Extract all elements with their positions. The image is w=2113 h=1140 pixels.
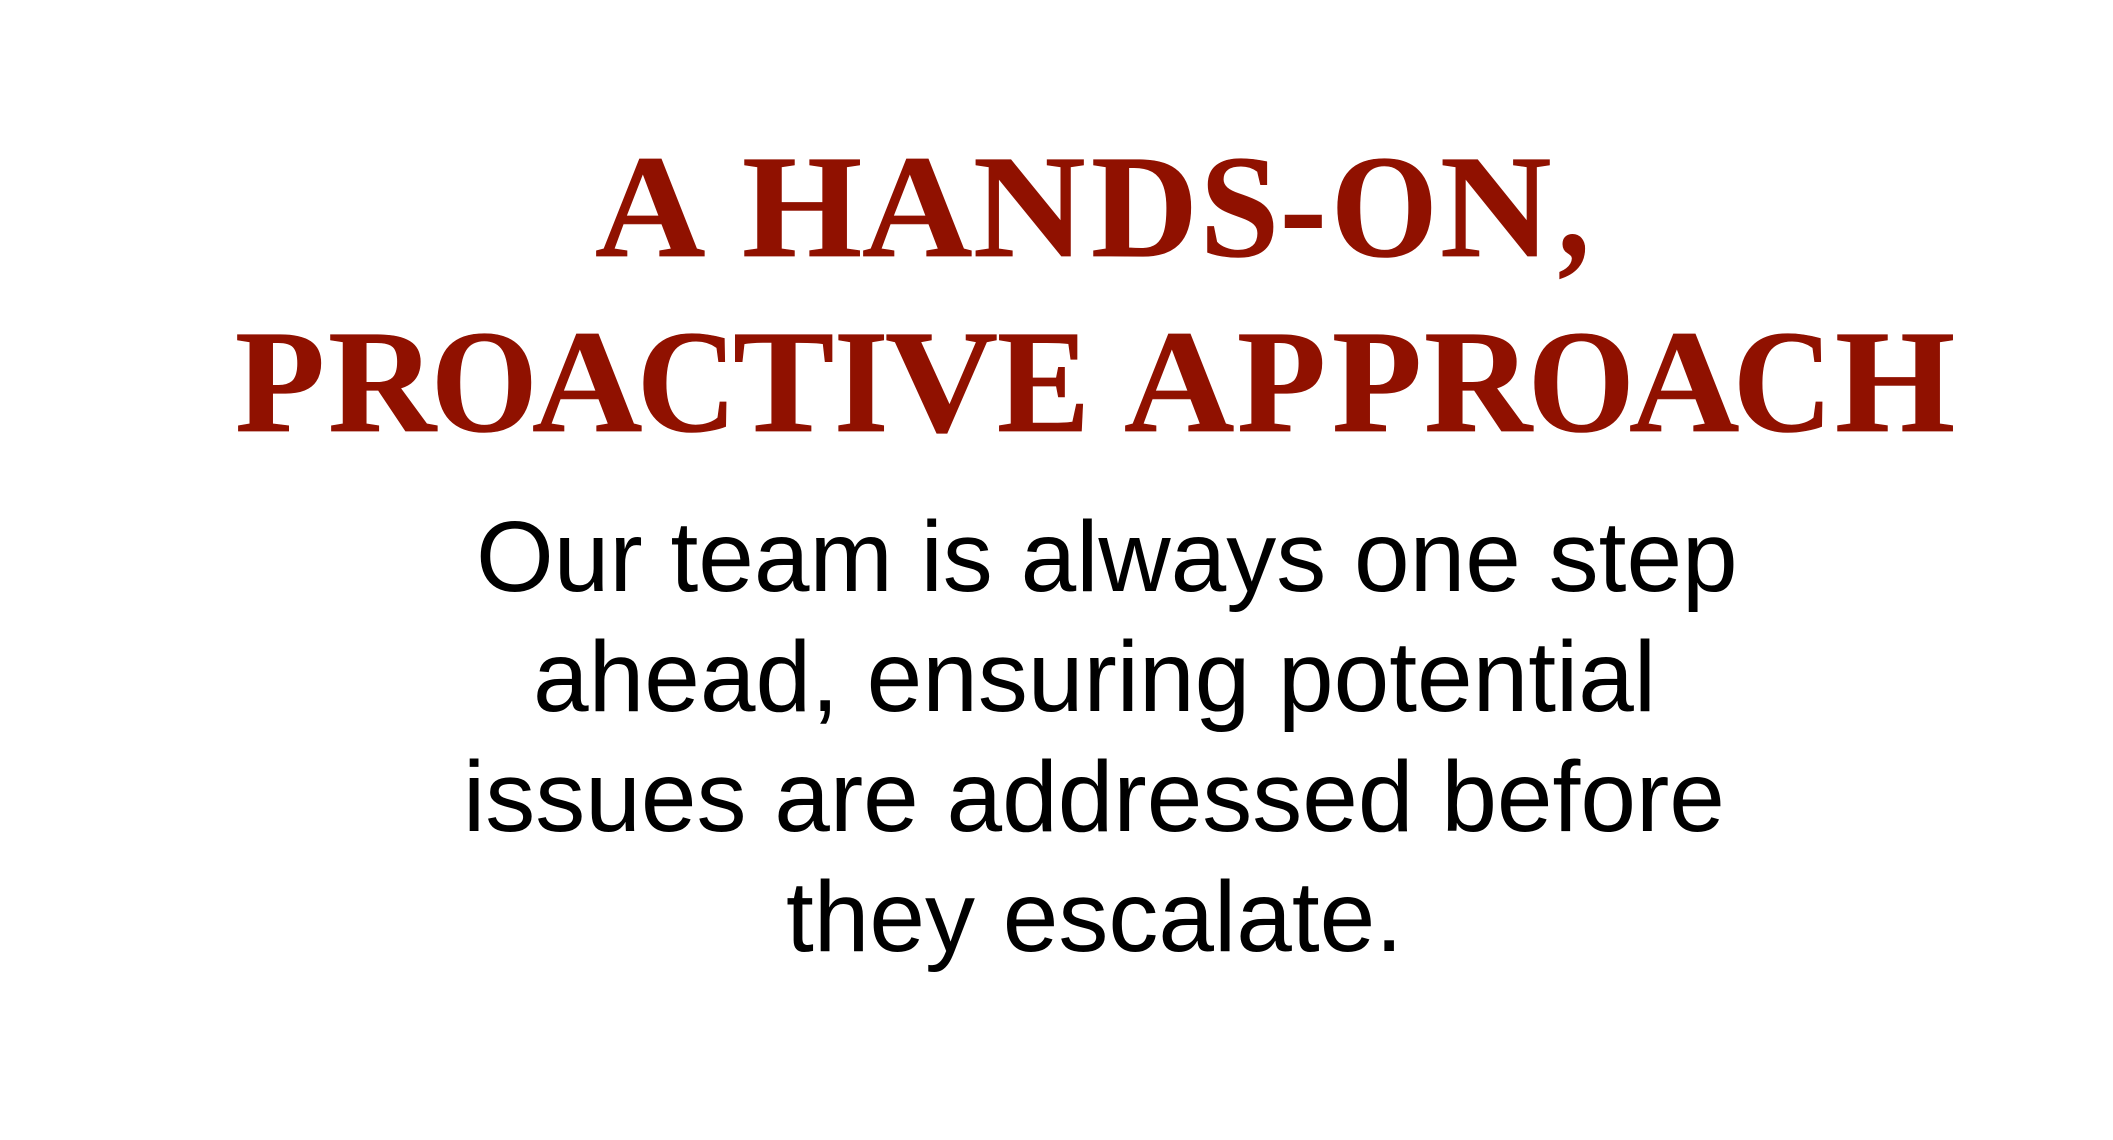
title [235, 125, 1955, 463]
title: R [328, 300, 436, 463]
title: N [973, 125, 1086, 288]
title: , [1558, 125, 1589, 288]
title: N [1440, 125, 1552, 288]
title: - [1280, 125, 1326, 288]
text block: description: Our team is always one step [476, 501, 1738, 613]
title: S [1200, 125, 1279, 288]
title: P [1237, 300, 1326, 463]
title: V [885, 300, 998, 463]
title: E [997, 300, 1090, 463]
title: H [742, 125, 862, 288]
title: P [1332, 300, 1422, 463]
text block: description: issues are addressed before [463, 741, 1725, 853]
title: O [1528, 300, 1635, 463]
title: C [1733, 300, 1833, 463]
text block: description [463, 501, 1738, 973]
title: A [1629, 300, 1739, 463]
title: H [1835, 300, 1955, 463]
title: A [862, 125, 972, 288]
text block: description: they escalate. [786, 861, 1403, 973]
title: P [235, 300, 325, 463]
title: C [637, 300, 737, 463]
title: T [733, 300, 835, 463]
title: I [834, 300, 889, 463]
title: A [595, 125, 705, 288]
title: R [1424, 300, 1532, 463]
title: A [532, 300, 642, 463]
title: D [1091, 125, 1198, 288]
title: A [1124, 300, 1234, 463]
title: O [431, 300, 538, 463]
text block: description: ahead, ensuring potential [533, 621, 1656, 733]
title: O [1331, 125, 1438, 288]
